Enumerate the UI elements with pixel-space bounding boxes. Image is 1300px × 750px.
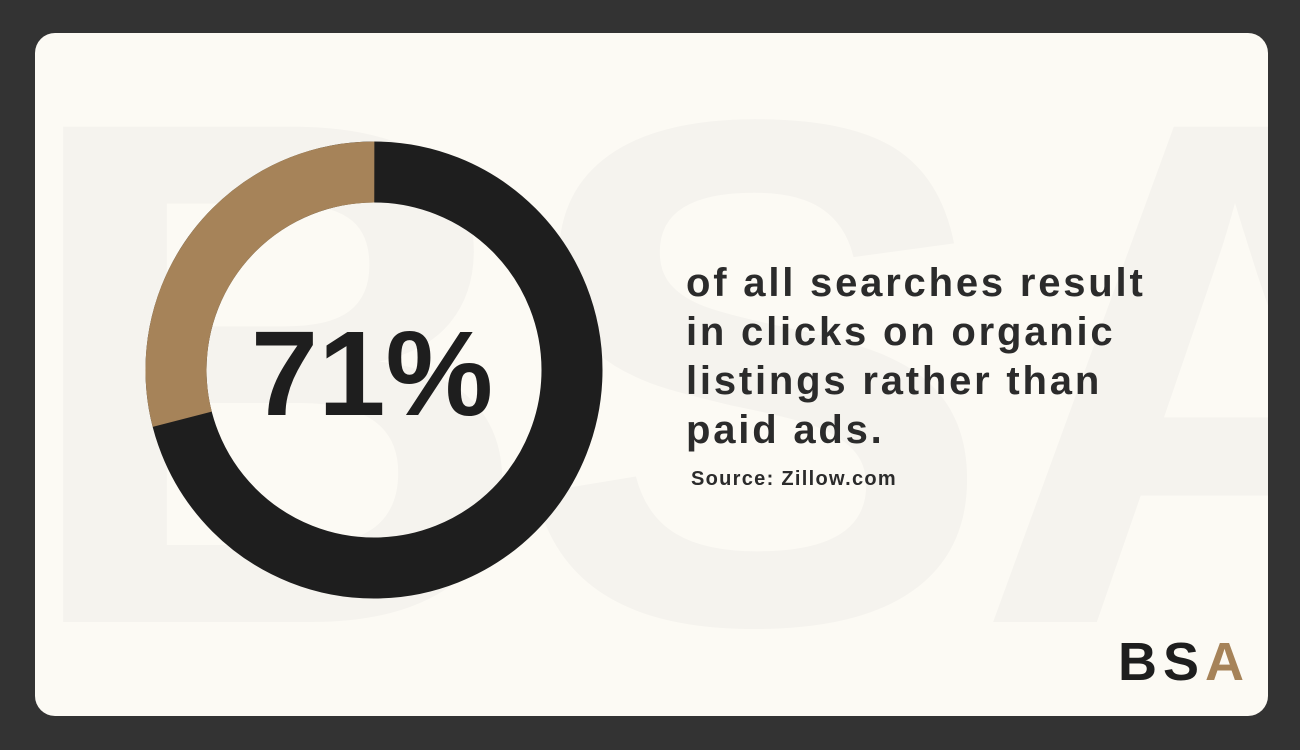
statement text: of all searches result (686, 261, 1146, 305)
logo: BSA (1118, 632, 1250, 692)
statement text: listings rather than (686, 359, 1102, 403)
statement text: paid ads. (686, 408, 885, 452)
source: Source: Zillow.com (691, 468, 897, 490)
statement text (686, 261, 1146, 452)
donut chart: 71% (251, 305, 493, 441)
statement text: in clicks on organic (686, 310, 1115, 354)
